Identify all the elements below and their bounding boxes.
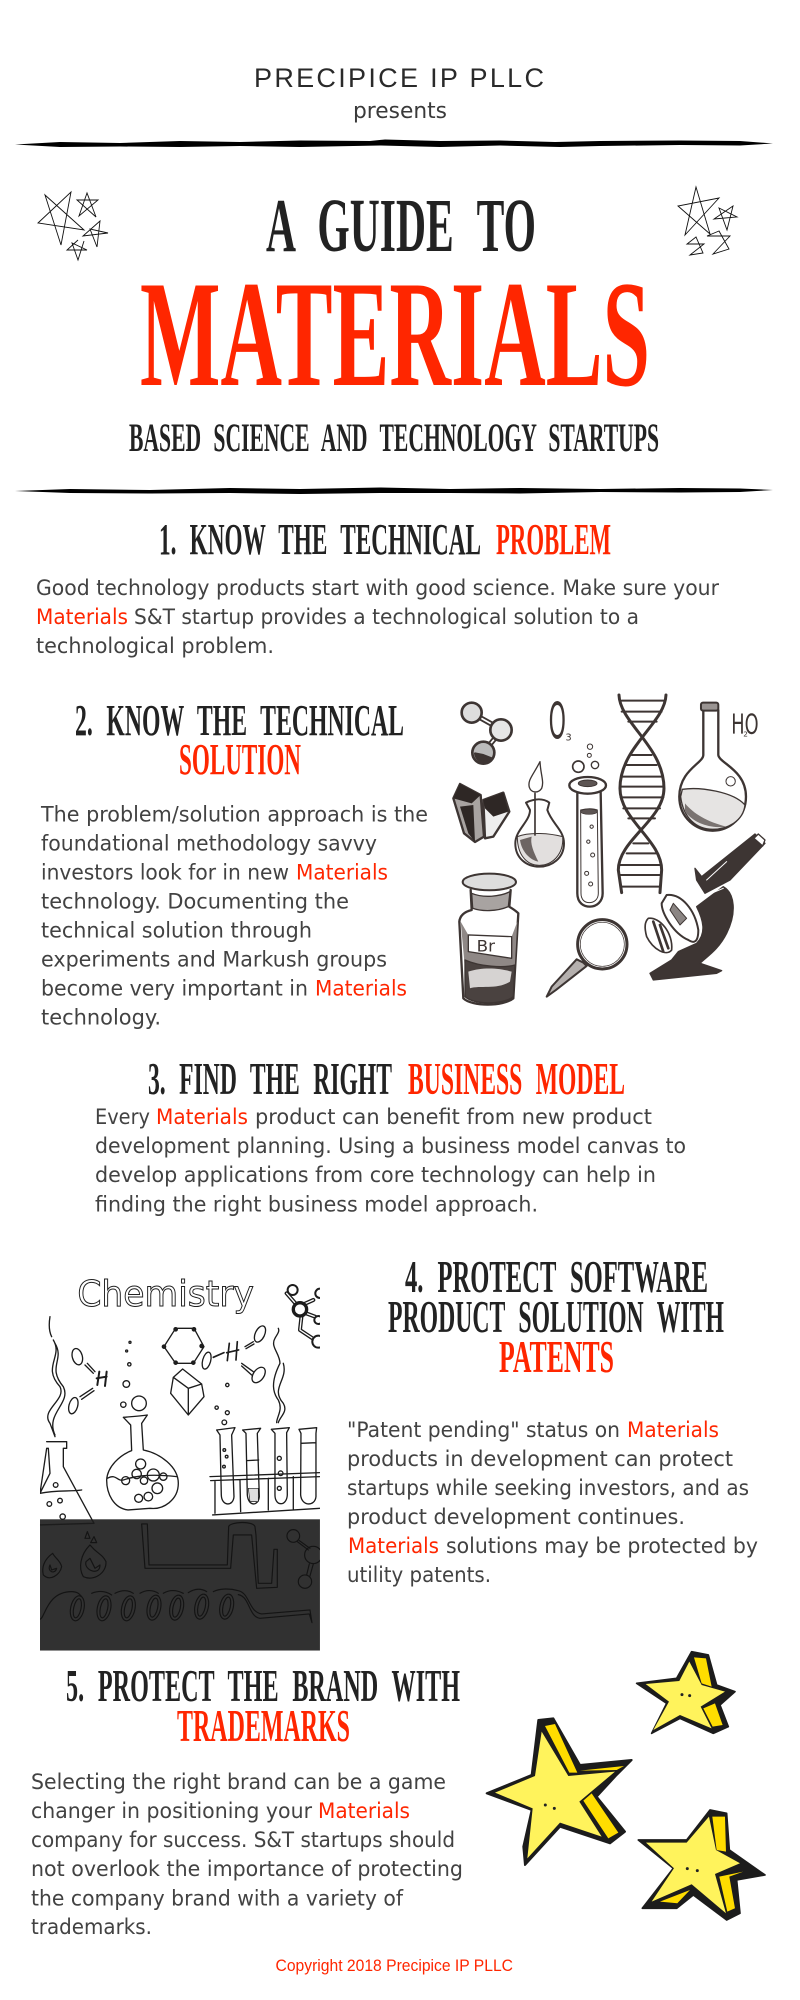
body text 4: solutions may be protected by xyxy=(446,1534,758,1559)
copyright: Copyright 2018 Precipice IP PLLC xyxy=(276,1957,513,1975)
heading 1: 1. KNOW THE TECHNICAL xyxy=(159,515,481,564)
body text 1: Materials xyxy=(36,605,128,630)
heading 4: PATENTS xyxy=(499,1331,614,1382)
heading 5: TRADEMARKS xyxy=(177,1700,350,1751)
body text 2: Materials xyxy=(296,860,388,886)
section 2: technical solution xyxy=(40,693,765,1030)
body text 3: Materials xyxy=(156,1105,248,1130)
body text 2: technology. Documenting the xyxy=(41,890,349,914)
star: small top xyxy=(637,1652,735,1733)
brush divider top xyxy=(15,140,773,147)
body text 2 xyxy=(40,802,428,1030)
body text 1: technological problem. xyxy=(36,634,274,659)
body text 5: trademarks. xyxy=(31,1915,152,1940)
body text 3: development planning. Using a business model canvas to xyxy=(95,1134,686,1159)
illustration: science sketches xyxy=(453,693,765,1005)
body text 2: Materials xyxy=(315,976,407,1002)
icon: magnifier xyxy=(547,920,627,997)
body text 3: Every xyxy=(95,1105,150,1130)
body text 1: S&T startup provides a technological solution to a xyxy=(134,605,639,630)
body text 5 xyxy=(31,1770,463,1940)
company name: PRECIPICE IP PLLC xyxy=(254,63,544,93)
body text 2: become very important in xyxy=(41,976,308,1002)
text: ozone formula: 3 xyxy=(565,733,572,744)
body text 3: develop applications from core technology can help in xyxy=(95,1163,656,1188)
body text 4: Materials xyxy=(627,1418,719,1443)
body text 5: the company brand with a variety of xyxy=(31,1886,403,1912)
header: presenter xyxy=(254,63,544,124)
icon: molecule xyxy=(462,703,512,764)
heading 5: 5. PROTECT THE BRAND WITH xyxy=(66,1660,460,1711)
star: large xyxy=(487,1718,632,1865)
brush divider bottom xyxy=(15,488,773,494)
heading 5 xyxy=(66,1660,460,1751)
body text 3 xyxy=(95,1105,686,1218)
star: lower right xyxy=(638,1810,765,1920)
icon: test tube xyxy=(569,744,606,907)
heading 2: SOLUTION xyxy=(179,735,301,784)
body text 2: foundational methodology savvy xyxy=(41,832,377,856)
body text 3: product can benefit from new product xyxy=(255,1105,652,1130)
heading 2: 2. KNOW THE TECHNICAL xyxy=(75,696,404,745)
body text 4: startups while seeking investors, and as xyxy=(347,1476,749,1501)
illustration: chemistry lab xyxy=(40,1274,325,1651)
heading 2 xyxy=(75,696,404,784)
icon: burner flask xyxy=(515,762,564,867)
icon: yellow stars xyxy=(487,1652,765,1920)
icon: sketched stars right xyxy=(678,187,737,255)
body text 5: Selecting the right brand can be a game xyxy=(31,1770,446,1795)
text: water formula xyxy=(731,707,759,740)
body text 4 xyxy=(347,1418,758,1588)
dark bench block xyxy=(40,1519,320,1651)
body text 2: technology. xyxy=(41,1006,161,1030)
body text 5: not overlook the importance of protecting xyxy=(31,1857,463,1882)
chemistry word: Chemistry xyxy=(77,1274,254,1315)
lab sketches xyxy=(40,1285,325,1525)
text: water formula: HO xyxy=(731,707,759,740)
icon: round flask xyxy=(679,703,746,831)
body text 5: changer in positioning your xyxy=(31,1799,312,1824)
bench sketches xyxy=(40,1523,322,1623)
presents: presents xyxy=(353,99,447,124)
body text 5: company for success. S&T startups should xyxy=(31,1828,455,1853)
body text 4: utility patents. xyxy=(347,1563,491,1588)
icon: sketched stars left xyxy=(38,192,108,260)
body text 4: "Patent pending" status on xyxy=(347,1418,620,1443)
body text 4: product development continues. xyxy=(347,1505,685,1530)
body text 4: products in development can protect xyxy=(347,1447,733,1472)
heading 3: 3. FIND THE RIGHT xyxy=(148,1053,392,1104)
text: ozone formula xyxy=(549,693,572,751)
title xyxy=(129,184,659,460)
body text 2: investors look for in new xyxy=(41,860,289,886)
icon: reagent jar: Br xyxy=(477,937,495,956)
body text 5: Materials xyxy=(318,1799,410,1824)
icon: reagent jar xyxy=(459,874,518,1005)
title line: a guide to: A GUIDE TO xyxy=(266,184,536,268)
body text 4: Materials xyxy=(348,1534,439,1559)
body text 2: The problem/solution approach is the xyxy=(40,802,428,828)
text: water formula: 2 xyxy=(743,730,748,739)
body text 1 xyxy=(36,576,719,659)
body text 2: experiments and Markush groups xyxy=(41,948,387,972)
section 4: patents xyxy=(40,1251,758,1651)
body text 3: finding the right business model approach. xyxy=(95,1192,538,1218)
heading 4 xyxy=(388,1251,724,1382)
icon: microscope xyxy=(645,834,765,980)
icon: DNA helix xyxy=(618,695,666,893)
body text 1: Good technology products start with good science. Make sure your xyxy=(36,576,719,601)
body text 2: technical solution through xyxy=(41,918,312,944)
text: ozone formula: O xyxy=(549,693,566,751)
section 5: trademarks xyxy=(31,1652,765,1940)
heading 1: PROBLEM xyxy=(496,515,611,564)
section 1: technical problem xyxy=(36,515,719,659)
icon: crystals xyxy=(453,784,509,842)
section 3: business model xyxy=(95,1053,686,1218)
